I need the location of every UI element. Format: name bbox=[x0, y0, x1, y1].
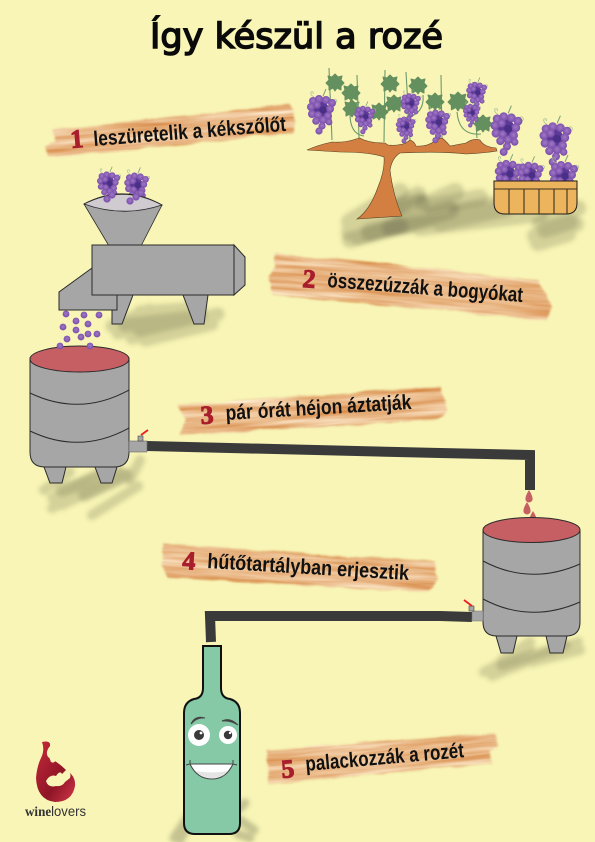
tank 2 bbox=[483, 518, 580, 653]
grapes on hopper bbox=[97, 167, 150, 206]
hopper grape overlap bbox=[103, 189, 145, 205]
pipe 1 bbox=[147, 446, 530, 490]
label 2: 2 bbox=[302, 264, 317, 294]
label 2: összezúzzák a bogyókat bbox=[327, 269, 524, 307]
title: Így készül a rozé bbox=[150, 15, 443, 57]
label 3 bbox=[174, 371, 451, 451]
valve 1 bbox=[129, 430, 148, 452]
lid bbox=[30, 346, 129, 372]
chute bbox=[59, 268, 117, 310]
body bbox=[483, 530, 580, 636]
machine shadow bbox=[112, 308, 218, 340]
label 1: 1 bbox=[69, 124, 84, 154]
end cap bbox=[234, 245, 245, 295]
label 2 bbox=[263, 231, 557, 342]
label 4: 4 bbox=[182, 546, 196, 576]
bands bbox=[483, 561, 580, 612]
grapes in basket bbox=[495, 154, 579, 201]
valve 2 bbox=[464, 600, 483, 621]
grapes landing in tank bbox=[57, 343, 93, 349]
grape clusters on vine bbox=[307, 77, 572, 166]
vine trunk and branch bbox=[307, 138, 497, 219]
basket bbox=[494, 181, 577, 214]
logo text: winelovers bbox=[25, 803, 86, 820]
logo drop bbox=[36, 742, 75, 802]
body bbox=[30, 358, 129, 467]
legs bbox=[44, 467, 117, 483]
pipe 2 bbox=[210, 616, 472, 642]
label 4: hűtőtartályban erjesztik bbox=[207, 550, 410, 585]
vine leaves bbox=[326, 74, 492, 132]
tank 1 shadow bbox=[44, 460, 140, 515]
tank 2 shadow bbox=[484, 642, 580, 676]
label 5: palackozzák a rozét bbox=[304, 739, 465, 776]
crusher machine bbox=[59, 167, 245, 324]
tank 1 bbox=[30, 346, 129, 483]
right eye bbox=[219, 726, 237, 744]
bottle bbox=[184, 646, 240, 834]
lid bbox=[483, 518, 580, 542]
logo: winelovers bbox=[25, 742, 86, 820]
eyebrows bbox=[191, 717, 238, 725]
ground shadow: vine and basket bbox=[350, 192, 578, 243]
legs bbox=[496, 636, 567, 653]
label 3: 3 bbox=[200, 400, 214, 430]
label 4 bbox=[159, 528, 441, 608]
label 3: pár órát héjon áztatják bbox=[225, 391, 412, 425]
label 1: leszüretelik a kékszőlőt bbox=[93, 113, 287, 151]
label 5 bbox=[261, 713, 502, 804]
smile bbox=[186, 760, 237, 779]
bottle shadow bbox=[174, 803, 254, 840]
vine stems bbox=[329, 68, 481, 142]
body bbox=[92, 245, 234, 295]
legs bbox=[112, 295, 208, 324]
bands bbox=[30, 390, 129, 442]
wine drops bbox=[523, 490, 537, 524]
left eye bbox=[188, 724, 210, 746]
label 5: 5 bbox=[280, 754, 295, 784]
falling grapes bbox=[60, 311, 102, 342]
label 1 bbox=[41, 84, 301, 177]
hopper bbox=[84, 194, 162, 246]
